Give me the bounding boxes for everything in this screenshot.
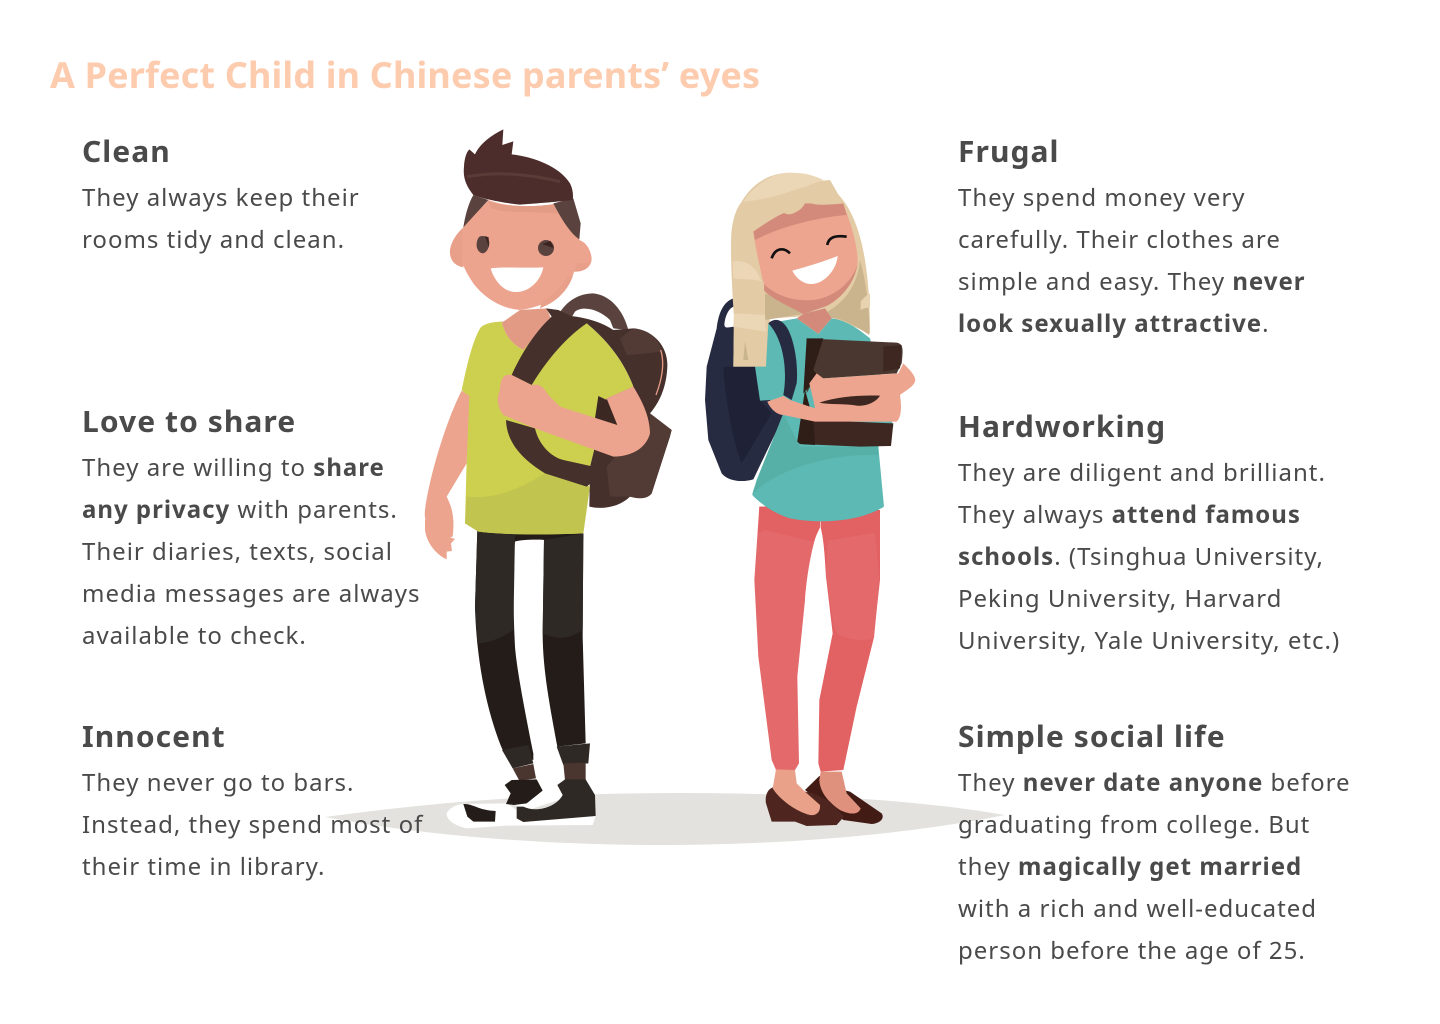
- text block: Love to share: media messages are always: [82, 577, 420, 610]
- text block: Hardworking: University, Yale University, etc.): [958, 624, 1340, 657]
- text block: Love to share: [82, 400, 420, 652]
- text block: Love to share: They are willing to share: [82, 451, 385, 484]
- text block: Clean: Clean: [82, 130, 171, 171]
- text block: Hardworking: They are diligent and brilliant.: [958, 456, 1326, 489]
- text block: Love to share: Love to share: [82, 400, 296, 441]
- boy: legs and shoes: [425, 520, 596, 828]
- text block: Simple social life: they magically get married: [958, 850, 1302, 883]
- boy: upper body with backpack: [425, 129, 672, 540]
- text block: Clean: [82, 130, 360, 256]
- text block: Clean: rooms tidy and clean.: [82, 223, 345, 256]
- text block: Simple social life: graduating from college. But: [958, 808, 1310, 841]
- text block: Frugal: They spend money very: [958, 181, 1246, 214]
- text block: Hardworking: They always attend famous: [958, 498, 1301, 531]
- text block: Frugal: look sexually attractive.: [958, 307, 1270, 340]
- text block: Hardworking: Peking University, Harvard: [958, 582, 1282, 615]
- text block: Simple social life: person before the age of 25.: [958, 934, 1306, 967]
- text block: Innocent: their time in library.: [82, 850, 325, 883]
- title: A Perfect Child in Chinese parents’ eyes: [50, 50, 760, 99]
- text block: Frugal: Frugal: [958, 130, 1060, 171]
- text block: Innocent: Innocent: [82, 715, 226, 756]
- text block: Simple social life: with a rich and well-educated: [958, 892, 1317, 925]
- text block: Innocent: Instead, they spend most of: [82, 808, 423, 841]
- text block: Frugal: simple and easy. They never: [958, 265, 1306, 298]
- text block: Love to share: any privacy with parents.: [82, 493, 398, 526]
- text block: Innocent: [82, 715, 424, 883]
- text block: Clean: They always keep their: [82, 181, 360, 214]
- text block: Simple social life: They never date anyone before: [958, 766, 1351, 799]
- text block: Hardworking: [958, 405, 1340, 657]
- text block: Love to share: available to check.: [82, 619, 307, 652]
- text block: Innocent: They never go to bars.: [82, 766, 354, 799]
- text block: Simple social life: Simple social life: [958, 715, 1226, 756]
- girl: upper body with backpack and books: [705, 173, 915, 521]
- text block: Hardworking: schools. (Tsinghua University,: [958, 540, 1324, 573]
- ground shadow: [325, 793, 1005, 845]
- text block: Frugal: carefully. Their clothes are: [958, 223, 1281, 256]
- girl: legs and shoes: [754, 507, 883, 826]
- text block: Simple social life: [958, 715, 1351, 967]
- text block: Hardworking: Hardworking: [958, 405, 1166, 446]
- text block: Frugal: [958, 130, 1306, 340]
- text block: Love to share: Their diaries, texts, social: [82, 535, 393, 568]
